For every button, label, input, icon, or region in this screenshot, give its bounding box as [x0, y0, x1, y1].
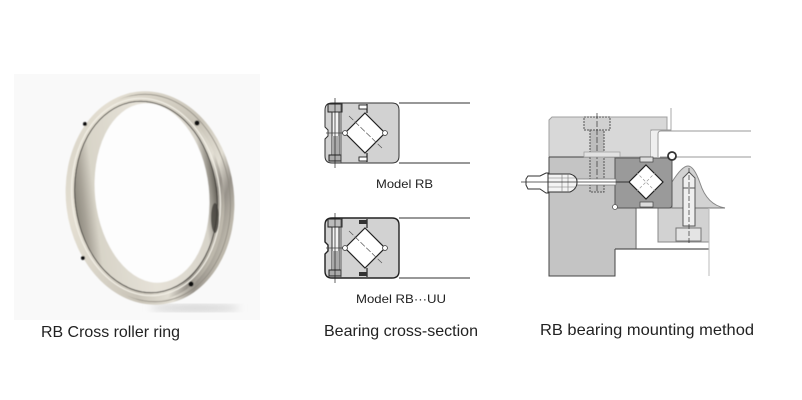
- upper bolt: [584, 113, 620, 193]
- caption: mounting: RB bearing mounting method: [540, 322, 754, 339]
- panel: ring photo: [14, 74, 260, 320]
- ring shadow: [150, 304, 240, 312]
- seal ring: [668, 152, 676, 160]
- diagram: Model RB UU cross-section: [325, 213, 470, 283]
- caption: ring: RB Cross roller ring: [41, 324, 180, 341]
- icon: cross roller ring: [54, 82, 246, 314]
- roller: [612, 157, 663, 210]
- upper housing: [549, 117, 667, 157]
- inner ring: [615, 158, 672, 208]
- lower housing: [549, 157, 636, 276]
- label: Model RB UU: Model RB···UU: [356, 292, 446, 306]
- roller: [343, 104, 387, 162]
- label: Model RB: Model RB: [376, 177, 433, 191]
- mounting bolt right: [676, 168, 701, 245]
- diagram: Model RB cross-section: [325, 98, 470, 168]
- bolt: [326, 213, 344, 283]
- bolt: [326, 98, 344, 168]
- right frame: [615, 130, 751, 276]
- diagram: mounting method: [521, 108, 751, 276]
- caption: cross-section: Bearing cross-section: [324, 323, 478, 340]
- roller: [343, 219, 387, 277]
- grease nipple: [521, 173, 622, 193]
